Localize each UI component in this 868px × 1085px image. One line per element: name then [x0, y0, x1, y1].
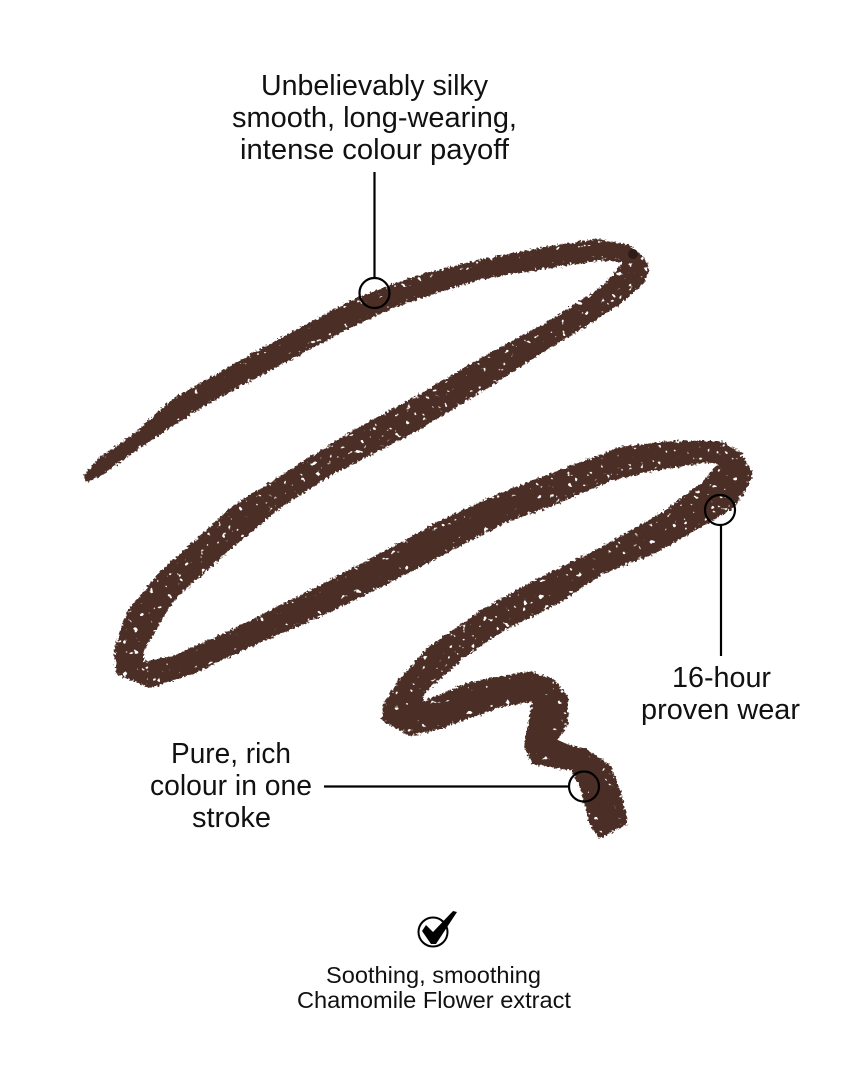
- leader line and marker: [705, 495, 735, 656]
- leader line and marker: [324, 772, 599, 802]
- callout text: pure colour: stroke: [192, 802, 271, 834]
- callout text: pure colour: colour in one: [150, 770, 312, 802]
- leader line and marker: [360, 172, 390, 308]
- callout: 16-hour wear: [641, 495, 800, 726]
- callout: silky smooth: [232, 70, 517, 308]
- callout text: 16-hour wear: proven wear: [641, 694, 800, 726]
- chamomile benefit text: Soothing, smoothing: [326, 962, 541, 988]
- brown pencil swatch stroke: [84, 240, 752, 837]
- callout text: pure colour: Pure, rich: [171, 738, 291, 770]
- solid core of the tail: [538, 695, 612, 830]
- callout text: pure colour: [150, 738, 312, 834]
- callout text: 16-hour wear: 16-hour: [672, 662, 771, 694]
- callout text: 16-hour wear: [641, 662, 800, 726]
- chamomile benefit text: Chamomile Flower extract: [297, 987, 572, 1013]
- solid core of the upper pass: [96, 250, 630, 471]
- icon: check mark in circle: [418, 911, 457, 946]
- callout text: silky smooth: intense colour payoff: [240, 134, 510, 166]
- callout: pure colour: [150, 738, 599, 834]
- pencil overlap dot: [628, 249, 638, 259]
- callout text: silky smooth: Unbelievably silky: [261, 70, 488, 102]
- solid core of the lower passes: [175, 495, 530, 667]
- solid core of the small hook: [400, 687, 540, 716]
- callout text: silky smooth: [232, 70, 517, 166]
- chamomile benefit text: [297, 962, 572, 1013]
- callout text: silky smooth: smooth, long-wearing,: [232, 102, 517, 134]
